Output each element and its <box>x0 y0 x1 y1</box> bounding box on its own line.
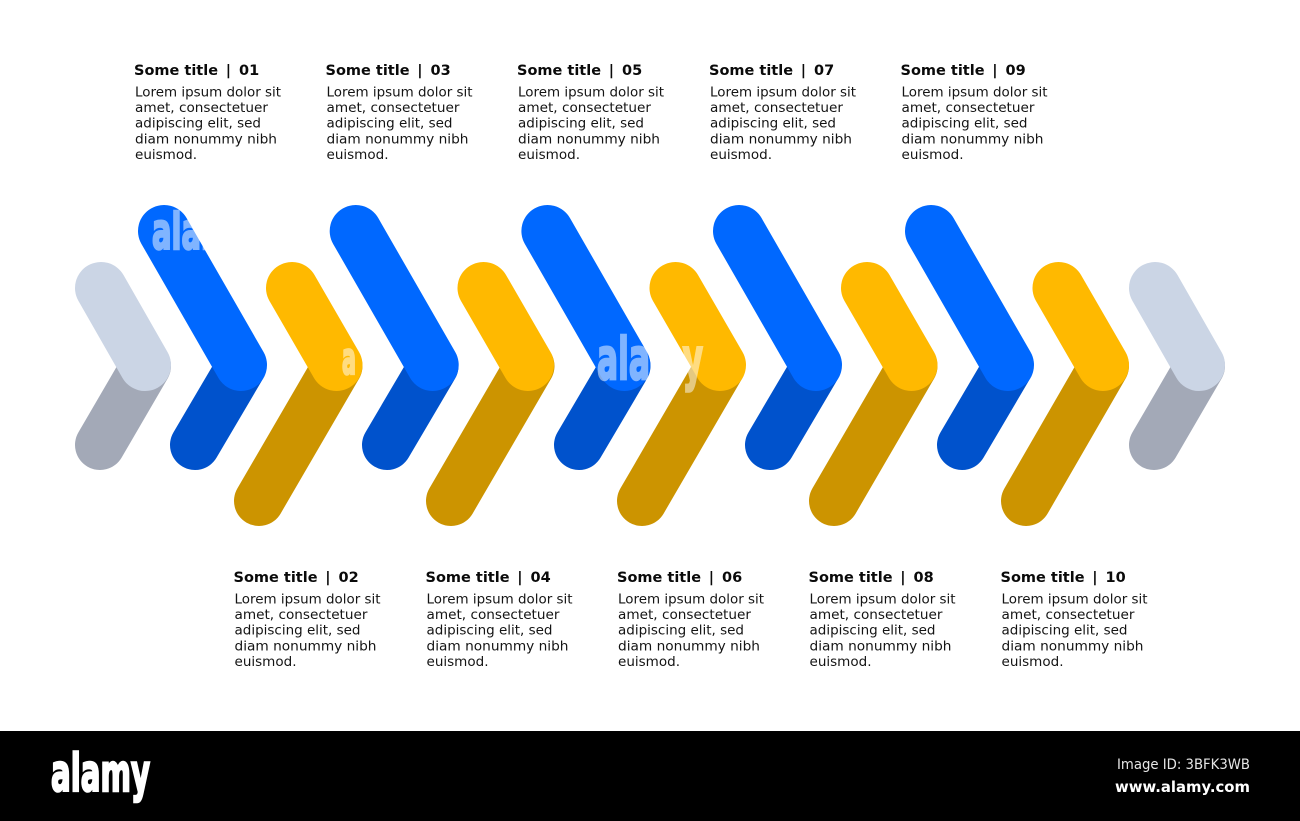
text block 07: Some title <box>709 63 793 79</box>
text block 03: euismod. <box>326 148 388 163</box>
text block 10: adipiscing elit, sed <box>1002 624 1128 639</box>
text block 10: amet, consectetuer <box>1002 608 1135 623</box>
text block 01: | <box>226 63 236 79</box>
text block 09: 09 <box>1006 63 1026 79</box>
chevron 05 blue <box>547 231 626 445</box>
text block 04: Some title <box>426 570 510 586</box>
text block 08: 08 <box>914 570 934 586</box>
text block 01: 01 <box>239 63 259 79</box>
text block 07: amet, consectetuer <box>710 101 844 116</box>
text block 08 <box>808 570 956 670</box>
text block 02: euismod. <box>234 655 296 670</box>
text block 04: adipiscing elit, sed <box>426 624 553 639</box>
text block 02: Lorem ipsum dolor sit <box>234 593 380 608</box>
text block 07: | <box>801 63 811 79</box>
text block 08: Some title <box>808 570 893 586</box>
text block 06: diam nonummy nibh <box>618 639 760 654</box>
text block 06: euismod. <box>618 655 680 670</box>
chevron 02 yellow <box>259 288 338 501</box>
text block 05: | <box>609 63 619 79</box>
text block 02 <box>234 570 380 670</box>
text block 03: adipiscing elit, sed <box>326 117 453 132</box>
text block 03: Some title <box>326 63 410 79</box>
text block 03: Lorem ipsum dolor sit <box>326 86 472 101</box>
text: a <box>342 334 356 385</box>
text block 06: adipiscing elit, sed <box>618 624 744 639</box>
text block 04: amet, consectetuer <box>426 608 560 623</box>
watermark: centre: alamy <box>597 325 703 393</box>
footer bar <box>0 731 1300 821</box>
chevron 07 blue <box>739 231 816 445</box>
text block 06 <box>617 570 764 670</box>
footer website: www.alamy.com <box>1115 778 1250 796</box>
text block 04: Lorem ipsum dolor sit <box>426 593 572 608</box>
text block 05: diam nonummy nibh <box>518 132 660 147</box>
text block 09: adipiscing elit, sed <box>902 117 1028 132</box>
text block 09 <box>900 63 1048 163</box>
text block 10: euismod. <box>1002 655 1064 670</box>
text block 10: Some title <box>1000 570 1085 586</box>
text block 04: 04 <box>530 570 551 586</box>
watermark: top left on blue chevron: alamy <box>152 203 250 261</box>
text block 07: diam nonummy nibh <box>710 132 852 147</box>
text block 10: diam nonummy nibh <box>1002 639 1144 654</box>
text block 03: amet, consectetuer <box>326 101 460 116</box>
chevron 10 yellow <box>1026 288 1104 501</box>
text block 02: | <box>325 570 336 586</box>
text block 05 <box>517 63 664 163</box>
text block 09: euismod. <box>902 148 964 163</box>
chevron 08 yellow <box>834 288 912 501</box>
text block 02: diam nonummy nibh <box>234 639 376 654</box>
text block 10 <box>1000 570 1148 670</box>
text block 01: adipiscing elit, sed <box>135 117 261 132</box>
text block 10: Lorem ipsum dolor sit <box>1002 593 1148 608</box>
text block 05: amet, consectetuer <box>518 101 652 116</box>
text block 03: 03 <box>430 63 451 79</box>
text block 05: Lorem ipsum dolor sit <box>518 86 664 101</box>
chevron 04 yellow <box>451 288 530 501</box>
text block 07: 07 <box>814 63 834 79</box>
text block 10: 10 <box>1106 570 1126 586</box>
text block 09: | <box>992 63 1003 79</box>
text block 06: Some title <box>617 570 701 586</box>
text block 02: adipiscing elit, sed <box>234 624 361 639</box>
text block 06: 06 <box>722 570 742 586</box>
text block 01: diam nonummy nibh <box>135 132 277 147</box>
text block 09: Lorem ipsum dolor sit <box>902 86 1048 101</box>
text block 08: adipiscing elit, sed <box>810 624 936 639</box>
chevron: end grey <box>1154 288 1200 445</box>
text block 08: amet, consectetuer <box>810 608 943 623</box>
footer logo: alamy <box>51 744 150 804</box>
text block 08: Lorem ipsum dolor sit <box>810 593 956 608</box>
text block 02: amet, consectetuer <box>234 608 368 623</box>
chevron 01 blue <box>164 231 242 445</box>
text block 04: diam nonummy nibh <box>426 639 568 654</box>
text block 08: euismod. <box>810 655 872 670</box>
text block 05: 05 <box>622 63 642 79</box>
chevron 03 blue <box>356 231 434 445</box>
text block 03: | <box>417 63 428 79</box>
text block 08: | <box>900 570 911 586</box>
text block 06: | <box>709 570 719 586</box>
text block 04: euismod. <box>426 655 488 670</box>
text block 08: diam nonummy nibh <box>810 639 952 654</box>
text block 09: Some title <box>900 63 985 79</box>
text block 10: | <box>1092 570 1103 586</box>
footer image id: Image ID: 3BFK3WB <box>1117 757 1250 773</box>
text block 09: diam nonummy nibh <box>902 132 1044 147</box>
chevron 06 yellow <box>642 288 720 501</box>
text block 06: Lorem ipsum dolor sit <box>618 593 764 608</box>
text block 05: adipiscing elit, sed <box>518 117 644 132</box>
text block 04 <box>426 570 572 670</box>
text block 01 <box>134 63 281 163</box>
chevron 09 blue <box>931 231 1008 445</box>
text block 06: amet, consectetuer <box>618 608 752 623</box>
text block 05: Some title <box>517 63 601 79</box>
text block 07: euismod. <box>710 148 772 163</box>
text block 07: adipiscing elit, sed <box>710 117 836 132</box>
text block 01: Some title <box>134 63 218 79</box>
text block 02: 02 <box>338 570 359 586</box>
text block 04: | <box>517 570 528 586</box>
text block 03: diam nonummy nibh <box>326 132 468 147</box>
text block 01: euismod. <box>135 148 197 163</box>
text block 09: amet, consectetuer <box>902 101 1035 116</box>
text block 07 <box>709 63 856 163</box>
text block 02: Some title <box>234 570 318 586</box>
text block 01: Lorem ipsum dolor sit <box>135 86 281 101</box>
text block 03 <box>326 63 472 163</box>
chevron: start grey <box>100 288 146 445</box>
text block 01: amet, consectetuer <box>135 101 269 116</box>
text block 05: euismod. <box>518 148 580 163</box>
text block 07: Lorem ipsum dolor sit <box>710 86 856 101</box>
